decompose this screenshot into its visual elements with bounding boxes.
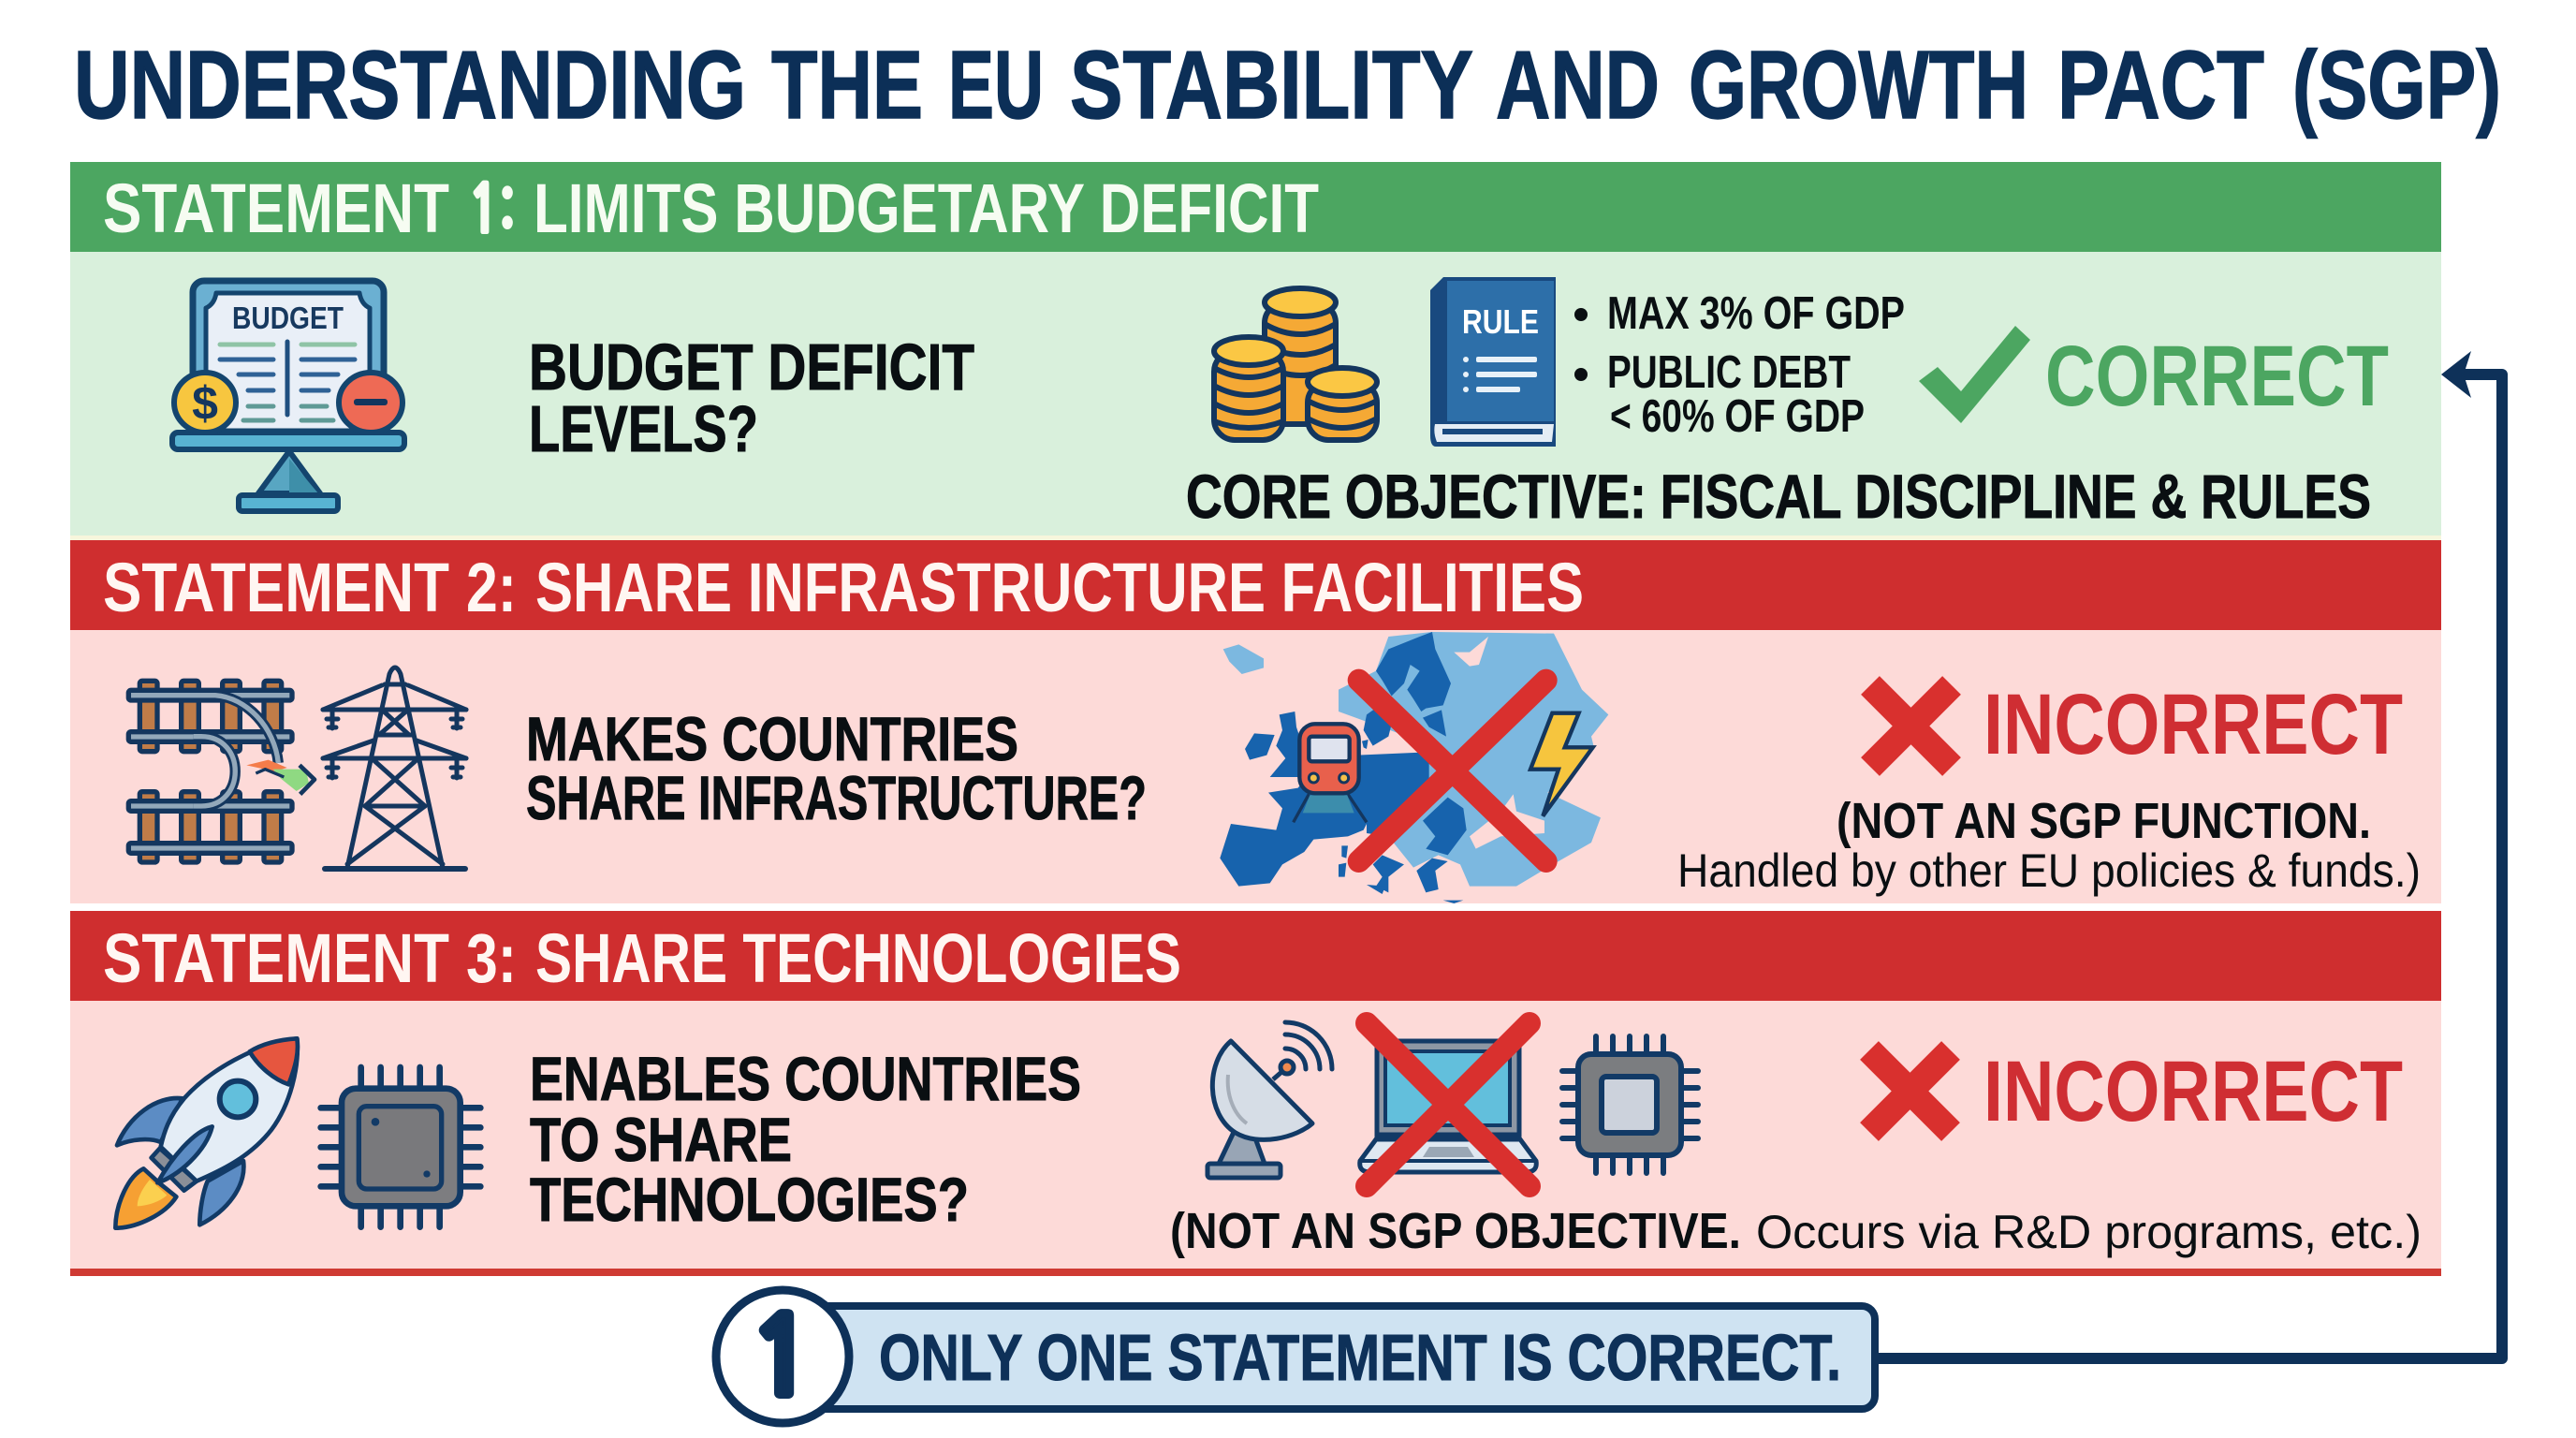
title	[74, 31, 2501, 139]
panel background: statement 2	[70, 630, 2441, 903]
icon: red x	[1869, 1050, 1951, 1132]
red cross	[1359, 681, 1546, 861]
title: (SGP)	[2292, 31, 2501, 139]
statement 2 header bar	[70, 540, 2441, 630]
icon: minus coin	[339, 373, 402, 433]
bottom red rule	[70, 1269, 2441, 1276]
question: makes countries share infrastructure	[526, 704, 1147, 832]
icon: budget monitor: BUDGET	[232, 301, 344, 335]
statement 2 header bar: SHARE INFRASTRUCTURE FACILITIES	[535, 549, 1584, 626]
explanation: statement 2	[1677, 793, 2421, 897]
question: enables countries to share technologies: ENABLES COUNTRIES	[530, 1044, 1081, 1113]
panel: statement 3	[70, 911, 2441, 1276]
icon: rule book: RULE	[1462, 302, 1539, 341]
icon: dollar coin	[174, 373, 236, 433]
icon: budget monitor	[172, 281, 404, 511]
icon: lightning bolt	[1530, 713, 1593, 816]
callout pill	[805, 1306, 1875, 1409]
explanation: statement 3: (NOT AN SGP OBJECTIVE.	[1170, 1203, 1741, 1259]
title: THE	[771, 31, 923, 139]
question: makes countries share infrastructure: SHARE INFRASTRUCTURE?	[526, 763, 1147, 832]
icon: train	[1294, 724, 1367, 822]
callout: only one statement is correct	[716, 1290, 1875, 1423]
icon: microchip	[321, 1067, 480, 1227]
cream divider	[70, 536, 2441, 540]
verdict: incorrect: INCORRECT	[1983, 677, 2403, 772]
icon: processor chip	[1562, 1036, 1698, 1173]
icon: satellite dish	[1208, 1022, 1332, 1178]
question: makes countries share infrastructure: MAKES COUNTRIES	[526, 704, 1018, 773]
statement 3 header bar: SHARE TECHNOLOGIES	[535, 919, 1181, 997]
statement 2 header bar: STATEMENT	[103, 549, 449, 626]
title: PACT	[2057, 31, 2264, 139]
icon: red x	[1870, 685, 1952, 767]
red cross	[1367, 1023, 1530, 1186]
statement 3 header bar: STATEMENT	[103, 919, 449, 997]
icon: dollar coin: $	[192, 377, 218, 430]
number badge: 1	[749, 1304, 814, 1410]
verdict: incorrect: INCORRECT	[1983, 1044, 2403, 1139]
question: budget deficit levels: BUDGET DEFICIT	[529, 330, 974, 404]
number badge	[716, 1290, 849, 1423]
rule bullet list: < 60% OF GDP	[1610, 391, 1865, 442]
statement 1 header bar	[70, 162, 2441, 252]
rule bullet list: PUBLIC DEBT	[1607, 347, 1851, 398]
explanation: statement 3	[1170, 1203, 2422, 1259]
question: enables countries to share technologies: TECHNOLOGIES?	[530, 1165, 969, 1234]
explanation: statement 3: Occurs via R&D programs, etc.)	[1756, 1206, 2422, 1258]
statement 1 header bar: STATEMENT	[103, 169, 449, 247]
panel background: statement 3	[70, 1001, 2441, 1269]
icon: green check mark	[1919, 326, 2030, 423]
title: STABILITY	[1070, 31, 1473, 139]
question: budget deficit levels: LEVELS?	[529, 392, 758, 465]
map of europe	[1220, 632, 1608, 903]
verdict: correct: CORRECT	[2045, 329, 2389, 424]
statement 3 header bar: 3:	[466, 919, 517, 997]
question: enables countries to share technologies: TO SHARE	[530, 1105, 792, 1174]
title: EU	[948, 31, 1044, 139]
icon: electricity pylon	[323, 668, 466, 869]
icon: railway tracks	[128, 681, 315, 862]
icon: coin stacks	[1214, 288, 1377, 440]
question: budget deficit levels	[529, 330, 974, 465]
explanation: statement 2: (NOT AN SGP FUNCTION.	[1837, 793, 2371, 849]
icon: rocket	[115, 1038, 298, 1228]
icon: rule book	[1430, 277, 1556, 447]
rule bullet list: MAX 3% OF GDP	[1607, 288, 1905, 339]
explanation: statement 2: Handled by other EU policies & funds.)	[1677, 844, 2421, 897]
panel: statement 1	[70, 162, 2441, 536]
title: UNDERSTANDING	[74, 31, 746, 139]
statement 1 header bar: 1:	[468, 178, 515, 242]
question: enables countries to share technologies	[530, 1044, 1081, 1234]
icon: junction arrow	[246, 760, 315, 794]
rule bullet list	[1574, 288, 1905, 442]
statement 1 header bar: LIMITS BUDGETARY DEFICIT	[534, 169, 1319, 247]
title: AND	[1496, 31, 1660, 139]
statement 3 header bar	[70, 911, 2441, 1001]
icon: laptop crossed out	[1360, 1023, 1536, 1186]
title: GROWTH	[1689, 31, 2028, 139]
callout text: ONLY ONE STATEMENT IS CORRECT.	[879, 1321, 1841, 1394]
statement 2 header bar: 2:	[466, 549, 517, 626]
panel: statement 2	[70, 540, 2441, 903]
icon: europe map crossed out	[1220, 632, 1608, 903]
arrow: from callout to correct verdict	[1875, 351, 2502, 1358]
panel background: statement 1	[70, 252, 2441, 536]
